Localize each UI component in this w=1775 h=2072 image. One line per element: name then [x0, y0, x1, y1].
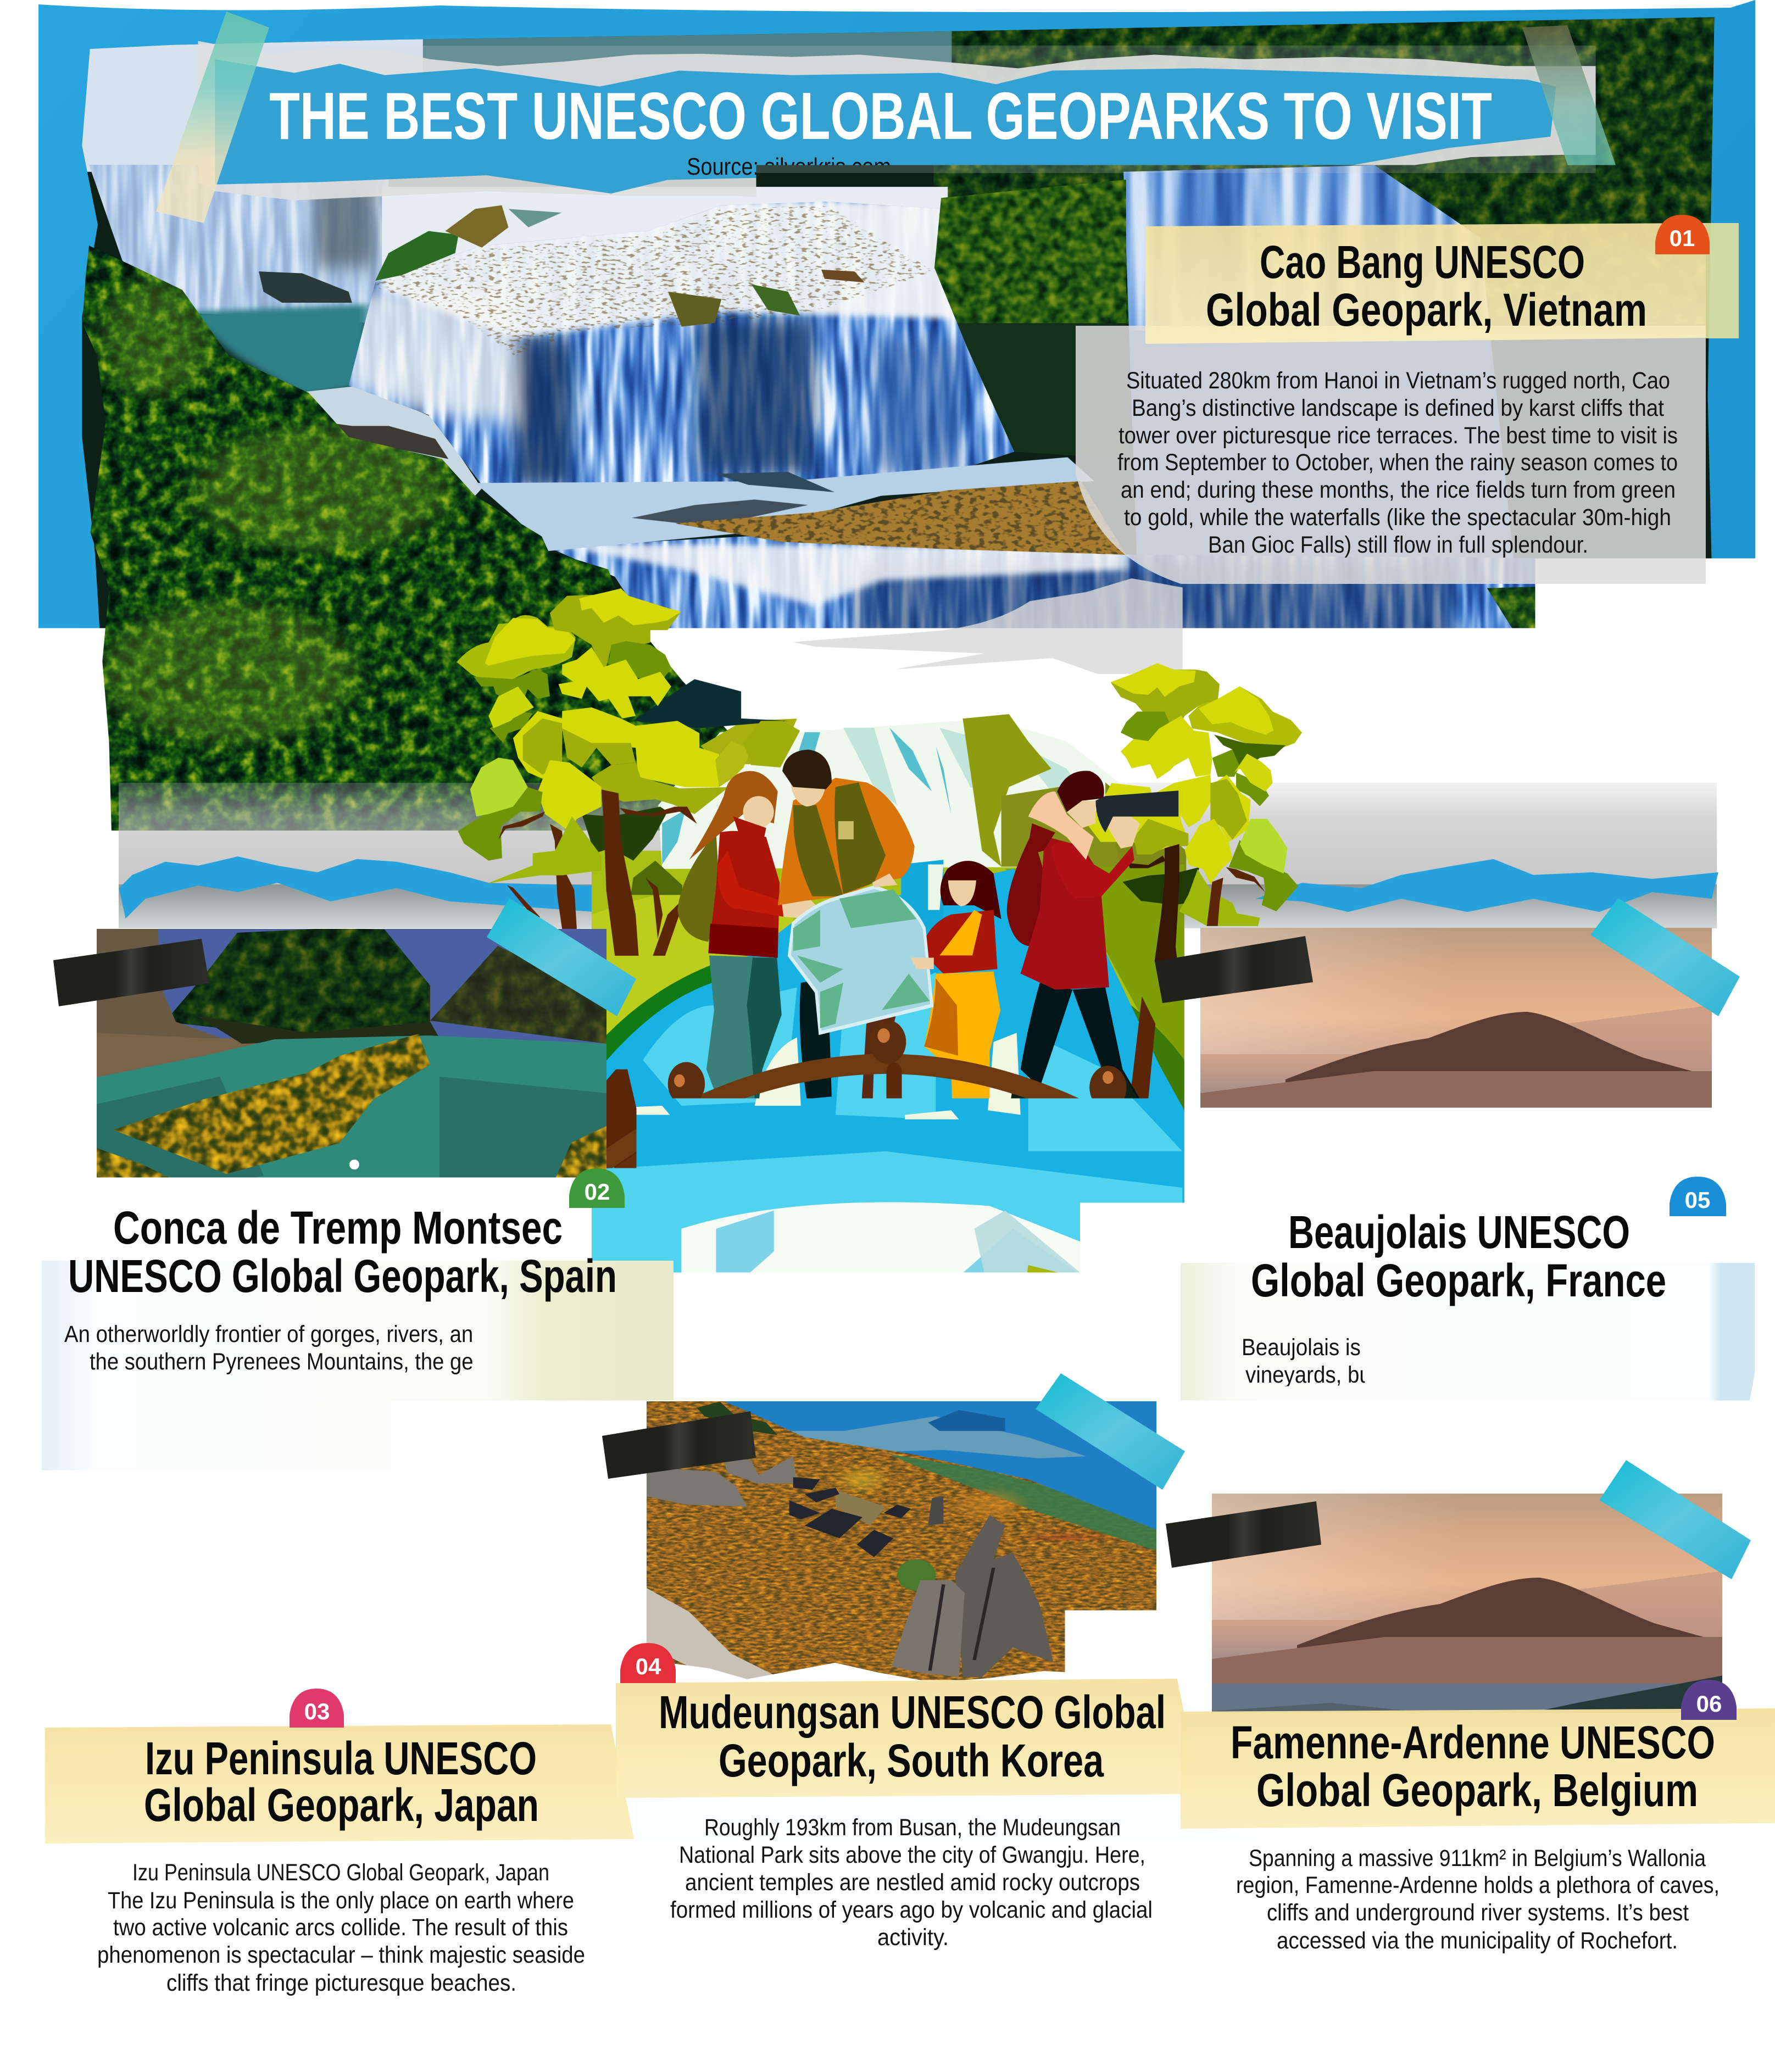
tape: Izu black — [54, 1509, 210, 1576]
badge 05 — [1670, 1177, 1726, 1216]
tape: Mudeungsan blue — [1036, 1373, 1185, 1490]
text: Mudeungsan: activity. — [877, 1924, 949, 1951]
Spain lake shade — [97, 1077, 606, 1214]
text: Izu — [97, 1859, 585, 1996]
Korea valley haze — [782, 1416, 1086, 1458]
heading: Cao Bang: Cao Bang UNESCO — [1260, 236, 1585, 288]
bright foliage highlights — [102, 279, 448, 742]
text: Mudeungsan: ancient temples are nestled amid rocky outcrops — [685, 1869, 1140, 1896]
heading: Conca de Tremp: Conca de Tremp Montsec — [113, 1202, 563, 1254]
photo tree behind — [633, 679, 788, 728]
badge 03: 03 — [304, 1698, 330, 1724]
text: Beaujolais: treasures that far predate the region’s winemaking — [1225, 1390, 1694, 1416]
dark foliage — [582, 807, 667, 861]
panel: Cao Bang body — [792, 326, 1706, 674]
badge 01: 01 — [1670, 225, 1695, 251]
torn blue edge left — [119, 856, 595, 918]
Spain sky — [97, 929, 606, 1209]
heading: Izu: Global Geopark, Japan — [144, 1779, 539, 1831]
text: Mudeungsan: Roughly 193km from Busan, the Mudeungsan — [704, 1814, 1121, 1841]
heading: Cao Bang — [1206, 236, 1647, 336]
hills — [700, 714, 1186, 910]
tape: title left — [156, 12, 269, 223]
badge 02 — [569, 1168, 625, 1208]
Korea small column — [928, 1496, 943, 1525]
panel: Conca de Tremp paper — [42, 1261, 674, 1520]
heading: Conca de Tremp: UNESCO Global Geopark, Spain — [68, 1250, 617, 1302]
banner: Izu — [45, 1724, 634, 1843]
bridge posts — [706, 1072, 1101, 1183]
main trunk — [602, 789, 638, 956]
badge 06: 06 — [1696, 1691, 1722, 1717]
banner: Conca de Tremp — [43, 1189, 674, 1313]
Korea white boulder — [646, 1588, 774, 1685]
hiker: woman with backpack — [677, 771, 818, 1158]
Korea rocks upper left — [646, 1456, 797, 1507]
rock ledge — [668, 477, 1134, 558]
Spain lake — [97, 1035, 606, 1214]
Spain shore — [97, 1033, 275, 1077]
logo credit: BY HUSNUL KHATIMAH — [842, 1323, 932, 1332]
banner frame — [198, 46, 1596, 173]
text: Cao Bang: an end; during these months, the rice fields turn from green — [1121, 477, 1676, 503]
tape: France black — [1155, 936, 1313, 1003]
text: Beaujolais — [1225, 1334, 1694, 1470]
logo slogan: Your New Voice — [859, 1294, 930, 1300]
upper falls top band — [382, 187, 948, 282]
text: Conca de Tremp: for hiking, horseback riding and kayaking through the — [68, 1431, 566, 1457]
upper band behind banner — [423, 26, 952, 146]
hiker: man with camera — [1005, 771, 1178, 1158]
lower left tree trunk — [593, 1070, 674, 1215]
text: Cao Bang: to gold, while the waterfalls (like the spectacular 30m-high — [1124, 504, 1671, 531]
text: Izu: two active volcanic arcs collide. The result of this — [113, 1914, 568, 1941]
rocks by foam — [312, 420, 448, 459]
Izu sea — [98, 1499, 610, 1590]
bushes — [592, 1265, 1182, 1438]
tape: title right — [1522, 25, 1618, 182]
bridge knobs — [668, 1062, 705, 1106]
grass right — [1005, 865, 1184, 1110]
photo: Izu — [98, 1499, 610, 1755]
text: Beaujolais: stone to 90 million-year-old fossils. — [1296, 1444, 1621, 1470]
tape: Spain blue — [487, 898, 636, 1016]
text: Conca de Tremp — [64, 1321, 568, 1485]
moss cliff right — [928, 176, 1127, 466]
tape: Famenne black — [1166, 1501, 1321, 1568]
badge 03 — [290, 1689, 344, 1728]
branches — [498, 807, 697, 956]
text: Conca de Tremp: An otherworldly frontier of gorges, rivers, and caves in — [64, 1321, 568, 1347]
heading: Conca de Tremp — [68, 1202, 617, 1302]
badge 01 — [1655, 215, 1710, 254]
teal pool — [182, 304, 369, 397]
heading: Mudeungsan — [659, 1686, 1166, 1786]
Izu crater shadow — [289, 1564, 327, 1579]
mist curtain — [82, 161, 395, 327]
water — [592, 860, 1184, 1224]
Spain mountains — [97, 929, 606, 1061]
title banner — [198, 41, 1596, 203]
Korea green ridge — [889, 1454, 1156, 1551]
badge 02: 02 — [585, 1179, 610, 1205]
heading: Mudeungsan: Mudeungsan UNESCO Global — [659, 1686, 1166, 1738]
banner: Mudeungsan — [616, 1679, 1200, 1798]
badge 06 — [1681, 1680, 1737, 1720]
photo: Spain — [97, 929, 606, 1214]
logo infographic: INFOGRAPHIC — [840, 1301, 935, 1321]
heading: Famenne — [1231, 1717, 1715, 1816]
main falls — [342, 198, 1021, 488]
hiker: man in orange — [778, 750, 915, 1144]
text: Famenne: cliffs and underground river systems. It’s best — [1267, 1900, 1689, 1926]
grass left — [592, 887, 793, 1060]
Korea dark peak — [928, 1410, 1005, 1431]
low shrub — [631, 861, 682, 895]
heading: Beaujolais — [1251, 1206, 1666, 1306]
logo rule — [840, 1300, 932, 1302]
text: Conca de Tremp: over 550 million years. The balmy weather is perfect — [75, 1403, 560, 1430]
mid pool — [475, 457, 1094, 551]
boulder — [259, 271, 352, 303]
left tree — [457, 588, 800, 956]
Korea sky valley — [646, 1401, 1157, 1695]
Izu hills and town — [98, 1499, 610, 1755]
text: Famenne: accessed via the municipality of Rochefort. — [1277, 1928, 1678, 1954]
grass right dark — [1101, 983, 1184, 1110]
banner: Famenne — [1181, 1708, 1775, 1829]
logo white tape — [774, 1256, 837, 1292]
right tree — [1088, 663, 1302, 961]
heading: Izu — [144, 1733, 539, 1831]
text: Izu: phenomenon is spectacular – think majestic seaside — [97, 1942, 585, 1968]
Korea green tree — [897, 1559, 936, 1591]
rubble specks — [362, 205, 948, 360]
text: Cao Bang: Ban Gioc Falls) still flow in full splendour. — [1208, 532, 1588, 558]
Korea rock columns — [955, 1515, 1053, 1677]
panel: Izu paper — [62, 1818, 622, 2047]
photo bottom fade — [119, 783, 1717, 893]
cloud decoration — [792, 578, 1183, 674]
tape: Izu blue — [487, 1468, 639, 1587]
right tree trunks — [1207, 867, 1265, 926]
text: Cao Bang: Situated 280km from Hanoi in Vietnam’s rugged north, Cao — [1126, 367, 1670, 394]
foliage lower left — [76, 242, 808, 831]
bridge struts — [612, 1117, 714, 1192]
text: Beaujolais: Beaujolais is perhaps best known for its rolling — [1242, 1334, 1677, 1361]
logo badge — [766, 1147, 970, 1359]
text: Famenne: Spanning a massive 911km² in Belgium’s Wallonia — [1249, 1845, 1706, 1872]
text: Cao Bang: Bang’s distinctive landscape is defined by karst cliffs that — [1132, 395, 1664, 421]
ground base — [592, 851, 1184, 1438]
grass left dark — [592, 965, 712, 1078]
text: Conca de Tremp: history of the Conca de Tremp Montsec dates back — [84, 1376, 553, 1402]
banner torn band — [198, 41, 1596, 203]
panel: Mudeungsan paper — [634, 1703, 1198, 2001]
decorative left tape shapes — [0, 1483, 203, 1697]
photo upper section — [79, 13, 1725, 912]
lower water under bridge — [592, 1151, 1182, 1397]
Korea courtyard — [836, 1490, 886, 1525]
illustration scenery — [592, 714, 1186, 1438]
crown mass — [457, 615, 576, 679]
hikers and bridge layer — [592, 750, 1205, 1361]
torn edge: Mudeungsan — [647, 1662, 1156, 1684]
text: Conca de Tremp: mesmerising landscape. — [205, 1458, 431, 1485]
main waterfall photograph — [76, 13, 1725, 928]
waterfall backdrop — [658, 718, 1125, 869]
Spain dark forest bank — [198, 1016, 439, 1044]
heading: Beaujolais: Global Geopark, France — [1251, 1255, 1666, 1306]
pin — [877, 1147, 920, 1215]
bridge rail — [600, 1064, 1200, 1183]
torn blue edge right — [1256, 859, 1718, 912]
banner: Cao Bang — [1145, 223, 1739, 344]
rocks in lagoon — [1359, 724, 1517, 773]
Korea colour patches — [643, 1469, 1163, 1679]
wooden bridge — [592, 1020, 1205, 1361]
text: Cao Bang: from September to October, when the rainy season comes to — [1117, 449, 1678, 476]
banner: Beaujolais — [1162, 1197, 1755, 1318]
text: Izu: Izu Peninsula UNESCO Global Geopark, Japan — [132, 1859, 549, 1886]
Korea hillside — [643, 1401, 1163, 1695]
lower falls — [542, 533, 1560, 864]
heading: Beaujolais: Beaujolais UNESCO — [1288, 1206, 1630, 1258]
tape: Famenne blue — [1599, 1460, 1751, 1579]
hiker: girl in yellow — [920, 861, 1005, 1144]
grey strip under photo — [119, 884, 1717, 928]
foliage lower right — [1472, 577, 1725, 714]
text: Cao Bang — [1117, 367, 1678, 558]
moss top left — [375, 205, 865, 327]
photo: Famenne — [1212, 1494, 1723, 1777]
photo: France — [1200, 928, 1712, 1211]
tape: France blue — [1590, 898, 1740, 1016]
badge 05: 05 — [1685, 1187, 1710, 1213]
torn edge: France — [1200, 1187, 1712, 1204]
source: Source: silverkris.com — [687, 153, 891, 180]
right tree dark foliage — [1122, 867, 1199, 905]
Korea temple roofs — [789, 1477, 911, 1557]
badge 04 — [620, 1643, 676, 1683]
Izu crater — [275, 1537, 435, 1585]
text: Beaujolais: vineyards, but the landscape holds geological — [1245, 1362, 1672, 1388]
text: Cao Bang: tower over picturesque rice terraces. The best time to visit is — [1119, 422, 1678, 449]
heading: Izu: Izu Peninsula UNESCO — [145, 1733, 537, 1784]
text: Beaujolais: tradition. From medieval castles built with local — [1239, 1416, 1678, 1442]
badge 04: 04 — [636, 1653, 661, 1679]
heading: Mudeungsan: Geopark, South Korea — [719, 1735, 1104, 1786]
text: Izu: The Izu Peninsula is the only place on earth where — [108, 1887, 574, 1914]
upper mist behind banner — [79, 26, 423, 172]
heading: Cao Bang: Global Geopark, Vietnam — [1206, 284, 1647, 336]
page background shadow — [22, 2032, 1763, 2065]
photo central section — [76, 161, 1560, 864]
Izu cone shadow — [496, 1589, 583, 1685]
Spain left cliff — [97, 929, 236, 1044]
Izu cone — [125, 1536, 591, 1729]
white card behind lower photos — [606, 1438, 1220, 1723]
logo tagline: NEW SARAWAK TRIBUNE — [840, 1284, 931, 1296]
bridge plank marks — [650, 1165, 1151, 1269]
text: Mudeungsan — [670, 1814, 1153, 1951]
lagoon — [1189, 661, 1718, 899]
logo tape — [766, 1249, 814, 1270]
torn edge: Spain — [97, 1181, 606, 1214]
bridge deck — [592, 1138, 1205, 1361]
logo paper circle — [802, 1191, 970, 1359]
banner blue strip — [215, 59, 1556, 193]
Korea trees top left — [697, 1401, 778, 1435]
panel: Beaujolais paper — [1181, 1263, 1755, 1516]
tape: Spain black — [53, 939, 209, 1006]
photo lower right — [1189, 577, 1725, 899]
tape: Mudeungsan black — [602, 1411, 756, 1479]
lower right tree trunk — [1113, 996, 1155, 1283]
photo: Mudeungsan — [643, 1401, 1163, 1695]
map — [789, 873, 934, 1033]
text: Conca de Tremp: the southern Pyrenees Mountains, the geological — [90, 1349, 544, 1375]
right tree crown — [1111, 663, 1220, 733]
central illustration: hikers on a bridge — [457, 588, 1302, 1438]
foam below pool — [296, 386, 482, 496]
back trunk — [507, 824, 577, 929]
text: Famenne: region, Famenne-Ardenne holds a plethora of caves, — [1236, 1872, 1720, 1898]
right upper falls — [1110, 159, 1573, 753]
text: Mudeungsan: National Park sits above the city of Gwangju. Here, — [679, 1842, 1145, 1868]
upper foliage — [934, 16, 1714, 324]
text: Izu: cliffs that fringe picturesque beaches. — [166, 1970, 516, 1996]
ST wordmark: ST — [840, 1211, 931, 1300]
text: Mudeungsan: formed millions of years ago by volcanic and glacial — [670, 1897, 1153, 1923]
Spain golden trees — [97, 1033, 606, 1214]
text: Famenne — [1236, 1845, 1720, 1954]
panel: Famenne paper — [1199, 1828, 1766, 2032]
